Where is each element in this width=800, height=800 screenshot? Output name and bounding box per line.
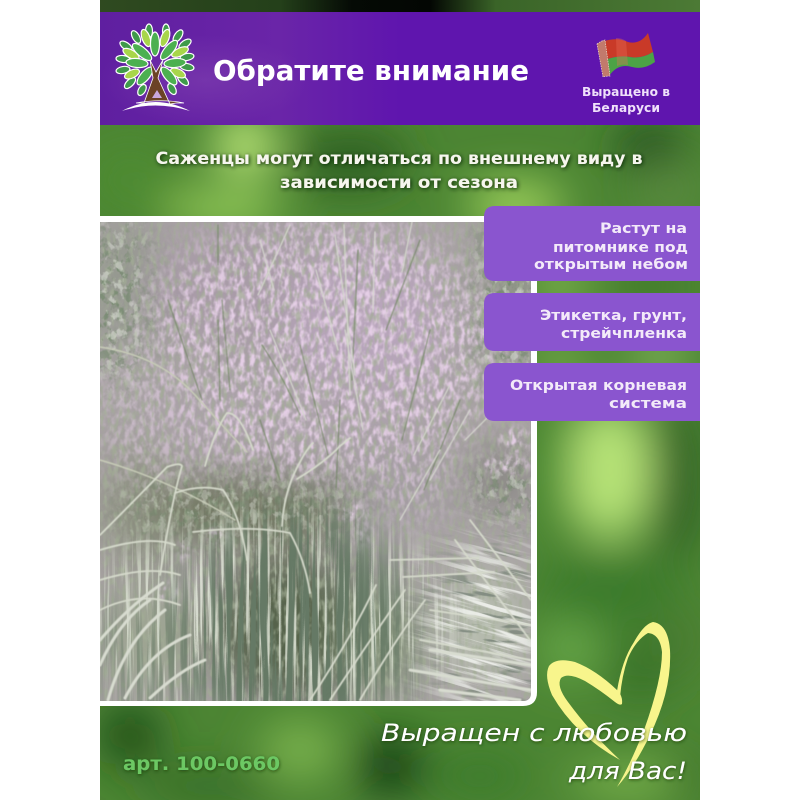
label: grown outdoors: питомнике под [553,240,688,256]
photo: curved striped blades [100,413,531,700]
photo: wide white leaf blades [100,583,531,700]
label: root system [484,363,700,421]
photo: thin blades upper [100,222,505,520]
subtitle note: Саженцы могут отличаться по внешнему виду в [156,149,642,168]
text: grown in Belarus: Выращено в [582,85,670,99]
icon: tree logo [115,24,195,111]
label: root system: Открытая корневая [510,378,687,394]
label: packaging: Этикетка, грунт, [540,308,687,324]
text: grown with love: Выращен с любовью [381,719,687,747]
photo: vertical stems [100,492,531,701]
text: grown in Belarus: Беларуси [592,101,660,115]
title: Обратите внимание [213,54,529,87]
label: packaging [484,293,700,351]
label: grown outdoors: открытым небом [534,257,688,273]
photo: pink flower mottling [100,222,531,701]
icon: Belarus flag [597,33,655,77]
label: root system: система [609,396,687,412]
text: grown with love: для Вас! [568,757,687,785]
subtitle note [156,149,642,192]
subtitle note: зависимости от сезона [280,173,518,192]
article number: арт. 100-0660 [123,754,280,775]
text: grown with love [381,719,687,785]
icon: yellow heart [547,622,670,787]
label: grown outdoors: Растут на [600,221,687,237]
label: packaging: стрейчпленка [561,326,687,342]
green bokeh background [80,0,700,800]
text: grown in Belarus [582,85,670,115]
header band [100,12,700,125]
label: grown outdoors [484,206,700,281]
photo: variegated feather reed grass [100,216,537,706]
